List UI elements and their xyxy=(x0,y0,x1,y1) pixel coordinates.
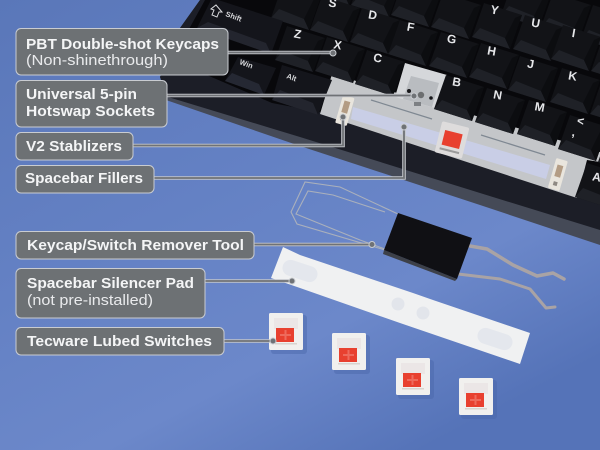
key legends: I xyxy=(571,26,577,40)
label: lubed switches: Tecware Lubed Switches xyxy=(27,334,212,350)
label: remover tool xyxy=(16,232,254,259)
leader line: keycaps xyxy=(228,50,336,56)
key legends: < xyxy=(576,114,585,129)
label: PBT keycaps xyxy=(16,28,228,75)
leader line: silencer pad xyxy=(205,278,295,284)
spacebar silencer pad xyxy=(271,247,530,364)
label: spacebar fillers xyxy=(16,166,154,193)
leader line: remover tool xyxy=(254,242,375,248)
switch plate xyxy=(320,74,600,198)
label: hotswap sockets: Universal 5-pin xyxy=(26,87,137,103)
label: spacebar fillers: Spacebar Fillers xyxy=(25,171,143,187)
installed red switch xyxy=(435,121,469,159)
key legends: M xyxy=(534,99,546,115)
key legends: G xyxy=(446,31,458,47)
left stabilizer xyxy=(335,95,355,126)
key legends: , xyxy=(571,125,577,139)
label: stabilizers xyxy=(16,132,133,160)
label: silencer pad: Spacebar Silencer Pad xyxy=(27,276,194,292)
label: PBT keycaps: (Non-shinethrough) xyxy=(26,53,168,69)
key legends: U xyxy=(530,15,541,31)
key legends: H xyxy=(486,43,497,59)
key legends: F xyxy=(406,20,416,35)
leader line: stabilizers xyxy=(133,114,346,146)
label: PBT keycaps: PBT Double-shot Keycaps xyxy=(26,37,219,53)
key legends: B xyxy=(451,74,463,90)
keycaps xyxy=(197,0,600,209)
key legends: K xyxy=(567,68,579,84)
key legends: N xyxy=(492,87,503,103)
remover tool xyxy=(291,182,564,308)
label: hotswap sockets: Hotswap Sockets xyxy=(26,104,155,120)
keyboard case xyxy=(160,0,600,245)
hotswap socket cutout xyxy=(395,63,447,108)
key well xyxy=(172,0,600,170)
leader line: sockets xyxy=(167,93,417,99)
key legends: Win xyxy=(238,57,255,71)
tool right tines xyxy=(458,246,564,308)
pad end slot left xyxy=(280,258,320,284)
keyboard case dark band xyxy=(160,0,600,230)
right stabilizer xyxy=(548,158,568,191)
pad end slot right xyxy=(475,326,515,352)
key legends: Y xyxy=(490,2,500,18)
plate slots xyxy=(371,100,545,155)
label: lubed switches xyxy=(16,328,224,355)
tool body side xyxy=(383,250,457,281)
key legends: J xyxy=(526,57,535,72)
key legends: X xyxy=(333,37,343,53)
key legends: Shift xyxy=(224,9,244,24)
label: stabilizers: V2 Stablizers xyxy=(26,139,122,155)
pad round hole left xyxy=(392,298,404,310)
leader line: switches xyxy=(224,338,276,344)
tool black body xyxy=(384,213,472,279)
key legends: C xyxy=(372,50,384,66)
label: hotswap sockets xyxy=(16,80,167,127)
label: silencer pad: (not pre-installed) xyxy=(27,293,153,309)
key legends xyxy=(211,0,600,185)
keyboard xyxy=(160,0,600,245)
label: silencer pad xyxy=(16,268,205,318)
key legends: D xyxy=(367,7,379,23)
key legends: Z xyxy=(293,27,303,42)
key legends: Alt xyxy=(285,71,298,83)
label: remover tool: Keycap/Switch Remover Tool xyxy=(27,238,244,254)
loose switches xyxy=(269,313,497,419)
leader line: fillers xyxy=(154,124,407,178)
spacebar filler strip xyxy=(351,107,550,179)
tool wire loops xyxy=(291,182,398,250)
pad round hole right xyxy=(416,306,430,320)
